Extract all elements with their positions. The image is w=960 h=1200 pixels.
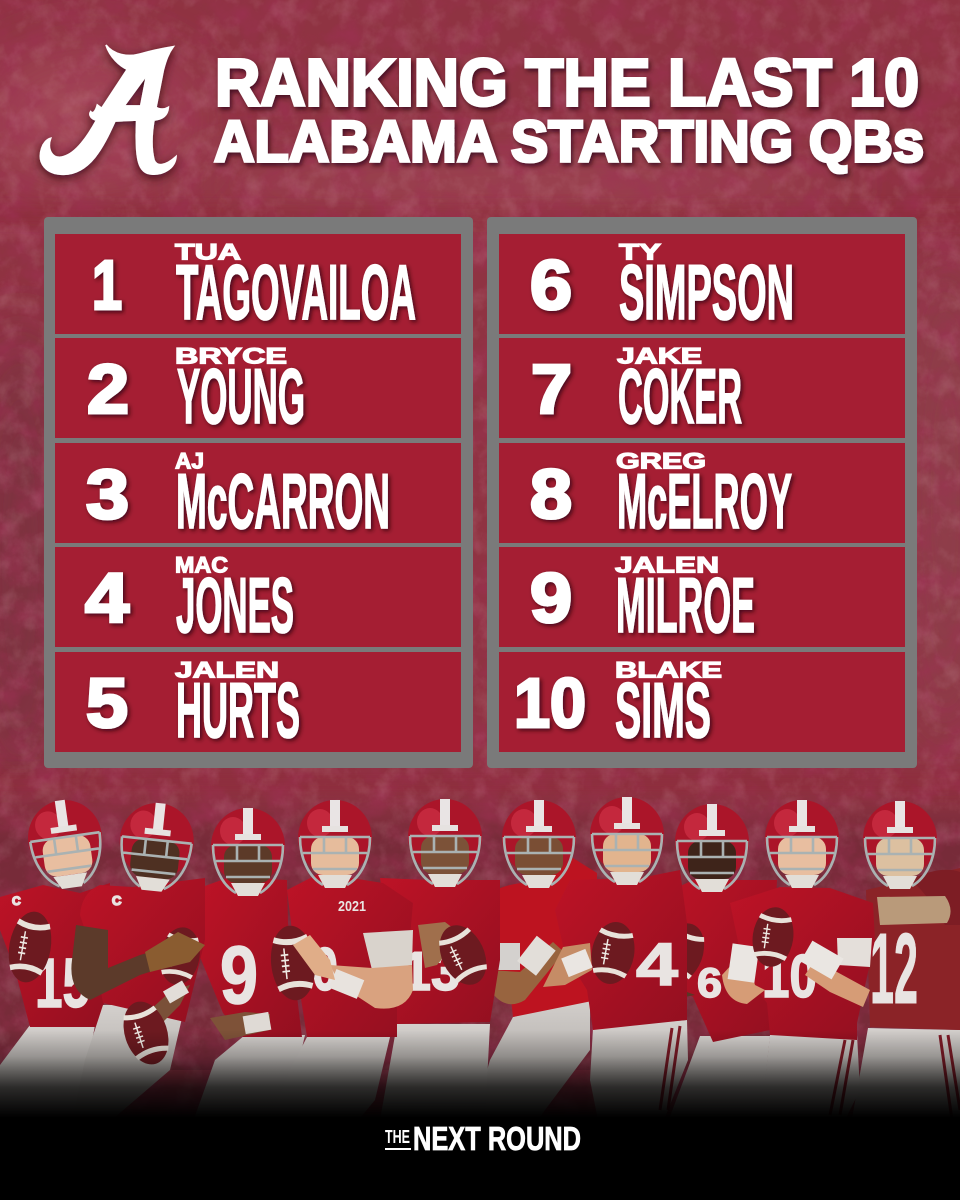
row: rank 10 Blake Sims: BLAKE [615,658,722,682]
player: number 6 behind centre: 6 [697,959,722,1006]
row: rank 3 AJ McCarron: 3 [86,455,129,533]
title: ALABAMA STARTING QBs [214,110,924,174]
row: rank 4 Mac Jones: 4 [85,559,129,637]
panel: ranks 1 to 5 [44,217,473,768]
row: rank 7 Jake Coker: JAKE [617,344,702,368]
row: rank 9 Jalen Milroe: JALEN [615,552,719,578]
row: rank 1 Tua Tagovailoa: TAGOVAILOA [176,248,416,336]
row: rank 3 AJ McCarron [55,443,461,545]
row: rank 1 Tua Tagovailoa: TUA [175,240,241,264]
row: rank 10 Blake Sims: 10 [514,664,586,742]
player: number 4 captain with tattoos: C [112,893,122,908]
row: rank 9 Jalen Milroe [499,547,905,649]
player: number 4 in the SEC jersey [543,797,688,1130]
row: rank 5 Jalen Hurts: 5 [86,664,128,742]
logo: The Next Round: NEXT ROUND [413,1120,581,1157]
row: rank 3 AJ McCarron: AJ [175,448,204,474]
player: number 10 in front [722,800,875,1130]
row: rank 8 Greg McElroy: GREG [616,448,706,474]
player: Mac Jones with 2021 patch: 0 [312,936,338,1003]
row: rank 2 Bryce Young: BRYCE [175,344,287,368]
row: rank 8 Greg McElroy: 8 [530,455,572,533]
row: rank 10 Blake Sims [499,652,905,754]
row: rank 6 Ty Simpson [499,234,905,336]
row: rank 7 Jake Coker: COKER [618,352,742,440]
row: rank 5 Jalen Hurts [55,652,461,754]
player: number 9 centre left: 9 [220,930,258,1021]
row: rank 4 Mac Jones: JONES [176,561,294,649]
player: Mac Jones with 2021 patch [265,800,413,1130]
row: rank 6 Ty Simpson: 6 [530,246,572,324]
row: rank 10 Blake Sims: SIMS [615,666,711,754]
illustration: lineup of ten quarterbacks [0,795,960,1130]
row: rank 9 Jalen Milroe: MILROE [616,561,755,649]
row: rank 4 Mac Jones [55,547,461,649]
row: rank 4 Mac Jones: MAC [175,552,228,578]
player: white sleeve quarterback [470,800,597,1130]
row: rank 5 Jalen Hurts: HURTS [176,666,300,754]
title [214,46,924,174]
row: rank 1 Tua Tagovailoa: 1 [92,246,122,324]
logo: The Next Round: THE [385,1127,410,1147]
row: rank 7 Jake Coker: 7 [531,350,572,428]
bottom black fade [0,1030,960,1200]
row: rank 2 Bryce Young [55,338,461,440]
player: number 13 behind Mac Jones: 13 [402,940,460,1002]
icon: Alabama script A logo [40,45,176,174]
row: rank 8 Greg McElroy [499,443,905,545]
player: number 9 centre left [190,808,305,1130]
player: number 15 at far left: 15 [35,944,90,1022]
row: rank 1 Tua Tagovailoa [55,234,461,336]
player: number 4 captain with tattoos [70,799,205,1130]
player: number 13 behind Mac Jones [380,799,500,1120]
panel: ranks 6 to 10 [487,217,917,768]
player: number 12 at far right [850,801,960,1130]
row: rank 5 Jalen Hurts: JALEN [175,658,279,682]
player: number 10 in front: 10 [762,943,817,1010]
player: Mac Jones with 2021 patch: 2021 [338,898,366,915]
row: rank 2 Bryce Young: 2 [87,350,129,428]
row: rank 3 AJ McCarron: McCARRON [176,457,390,545]
title: RANKING THE LAST 10 [215,46,919,120]
player: number 4 in the SEC jersey: 4 [636,931,679,998]
row: rank 9 Jalen Milroe: 9 [530,559,572,637]
player: number 15 at far left: C [12,894,21,908]
row: rank 2 Bryce Young: YOUNG [177,352,305,440]
row: rank 7 Jake Coker [499,338,905,440]
row: rank 6 Ty Simpson: TY [619,240,661,264]
logo: The Next Round [385,1120,581,1157]
player: number 15 at far left [0,795,110,1130]
player: number 6 behind centre [643,804,777,1130]
